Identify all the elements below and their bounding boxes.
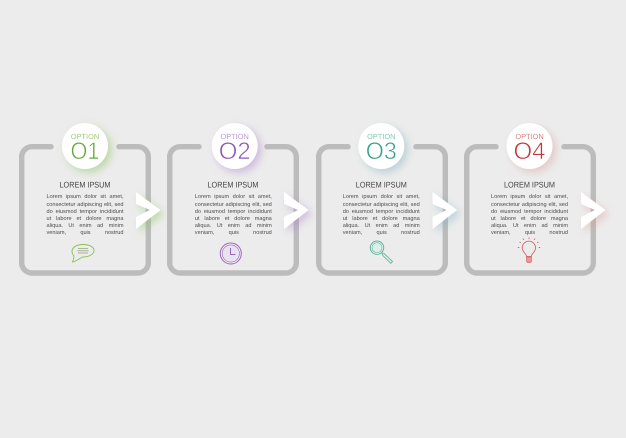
- panel: option 01: [19, 122, 166, 276]
- body text: veniam, quis nostrud: [343, 230, 420, 236]
- number 02: O2: [219, 138, 251, 165]
- body text: aliqua. Ut enim ad minim: [343, 223, 420, 229]
- icon: speech bubble: [72, 244, 94, 262]
- body text: Lorem ipsum dolor sit amet,: [491, 194, 568, 200]
- arrow chevron: [581, 192, 606, 229]
- badge circle: [358, 123, 404, 169]
- body text: aliqua. Ut enim ad minim: [195, 223, 272, 229]
- number 04: O4: [514, 138, 546, 165]
- heading: LOREM IPSUM: [60, 181, 111, 190]
- body text: [491, 194, 568, 236]
- body text: Lorem ipsum dolor sit amet,: [343, 194, 420, 200]
- body text: [342, 194, 420, 236]
- body text: consectetur adipiscing elit, sed: [195, 202, 272, 208]
- body text: veniam, quis nostrud: [195, 230, 272, 236]
- heading: LOREM IPSUM: [504, 181, 555, 190]
- badge circle: [506, 123, 552, 169]
- badge circle: [212, 123, 258, 169]
- body text: veniam, quis nostrud: [46, 230, 124, 236]
- option label: OPTION: [221, 132, 249, 141]
- body text: consectetur adipiscing elit, sed: [491, 202, 568, 208]
- body text: consectetur adipiscing elit, sed: [343, 202, 420, 208]
- panel: option 04: [464, 123, 608, 276]
- card frame: [467, 147, 593, 273]
- icon: magnifier: [370, 241, 392, 263]
- body text: do eiusmod tempor incididunt: [195, 209, 272, 215]
- body text: ut labore et dolore magna: [491, 216, 568, 222]
- body text: [194, 194, 272, 236]
- body text: ut labore et dolore magna: [46, 216, 124, 222]
- card frame: [170, 147, 297, 273]
- body text: consectetur adipiscing elit, sed: [46, 202, 124, 208]
- card frame: [22, 147, 148, 273]
- body text: aliqua. Ut enim ad minim: [46, 223, 124, 229]
- body text: Lorem ipsum dolor sit amet,: [195, 194, 272, 200]
- body text: ut labore et dolore magna: [195, 216, 272, 222]
- icon: light bulb: [518, 238, 540, 262]
- body text: aliqua. Ut enim ad minim: [491, 223, 568, 229]
- body text: do eiusmod tempor incididunt: [343, 209, 420, 215]
- body text: veniam, quis nostrud: [491, 230, 568, 236]
- body text: ut labore et dolore magna: [343, 216, 420, 222]
- option label: OPTION: [515, 132, 544, 141]
- body text: do eiusmod tempor incididunt: [491, 209, 568, 215]
- heading: LOREM IPSUM: [208, 181, 259, 190]
- body text: do eiusmod tempor incididunt: [46, 209, 124, 215]
- panel: option 02: [167, 123, 312, 276]
- arrow chevron: [136, 192, 160, 229]
- panel: option 03: [316, 123, 461, 276]
- arrow chevron: [432, 192, 457, 229]
- arrow chevron: [284, 192, 309, 229]
- body text: Lorem ipsum dolor sit amet,: [46, 194, 124, 200]
- option label: OPTION: [71, 132, 99, 141]
- heading: LOREM IPSUM: [355, 181, 407, 190]
- number 03: O3: [365, 138, 396, 165]
- number 01: O1: [70, 138, 100, 165]
- badge circle: [62, 123, 108, 169]
- option label: OPTION: [367, 132, 395, 141]
- icon: clock: [221, 243, 242, 264]
- body text: [46, 194, 124, 236]
- card frame: [318, 147, 445, 273]
